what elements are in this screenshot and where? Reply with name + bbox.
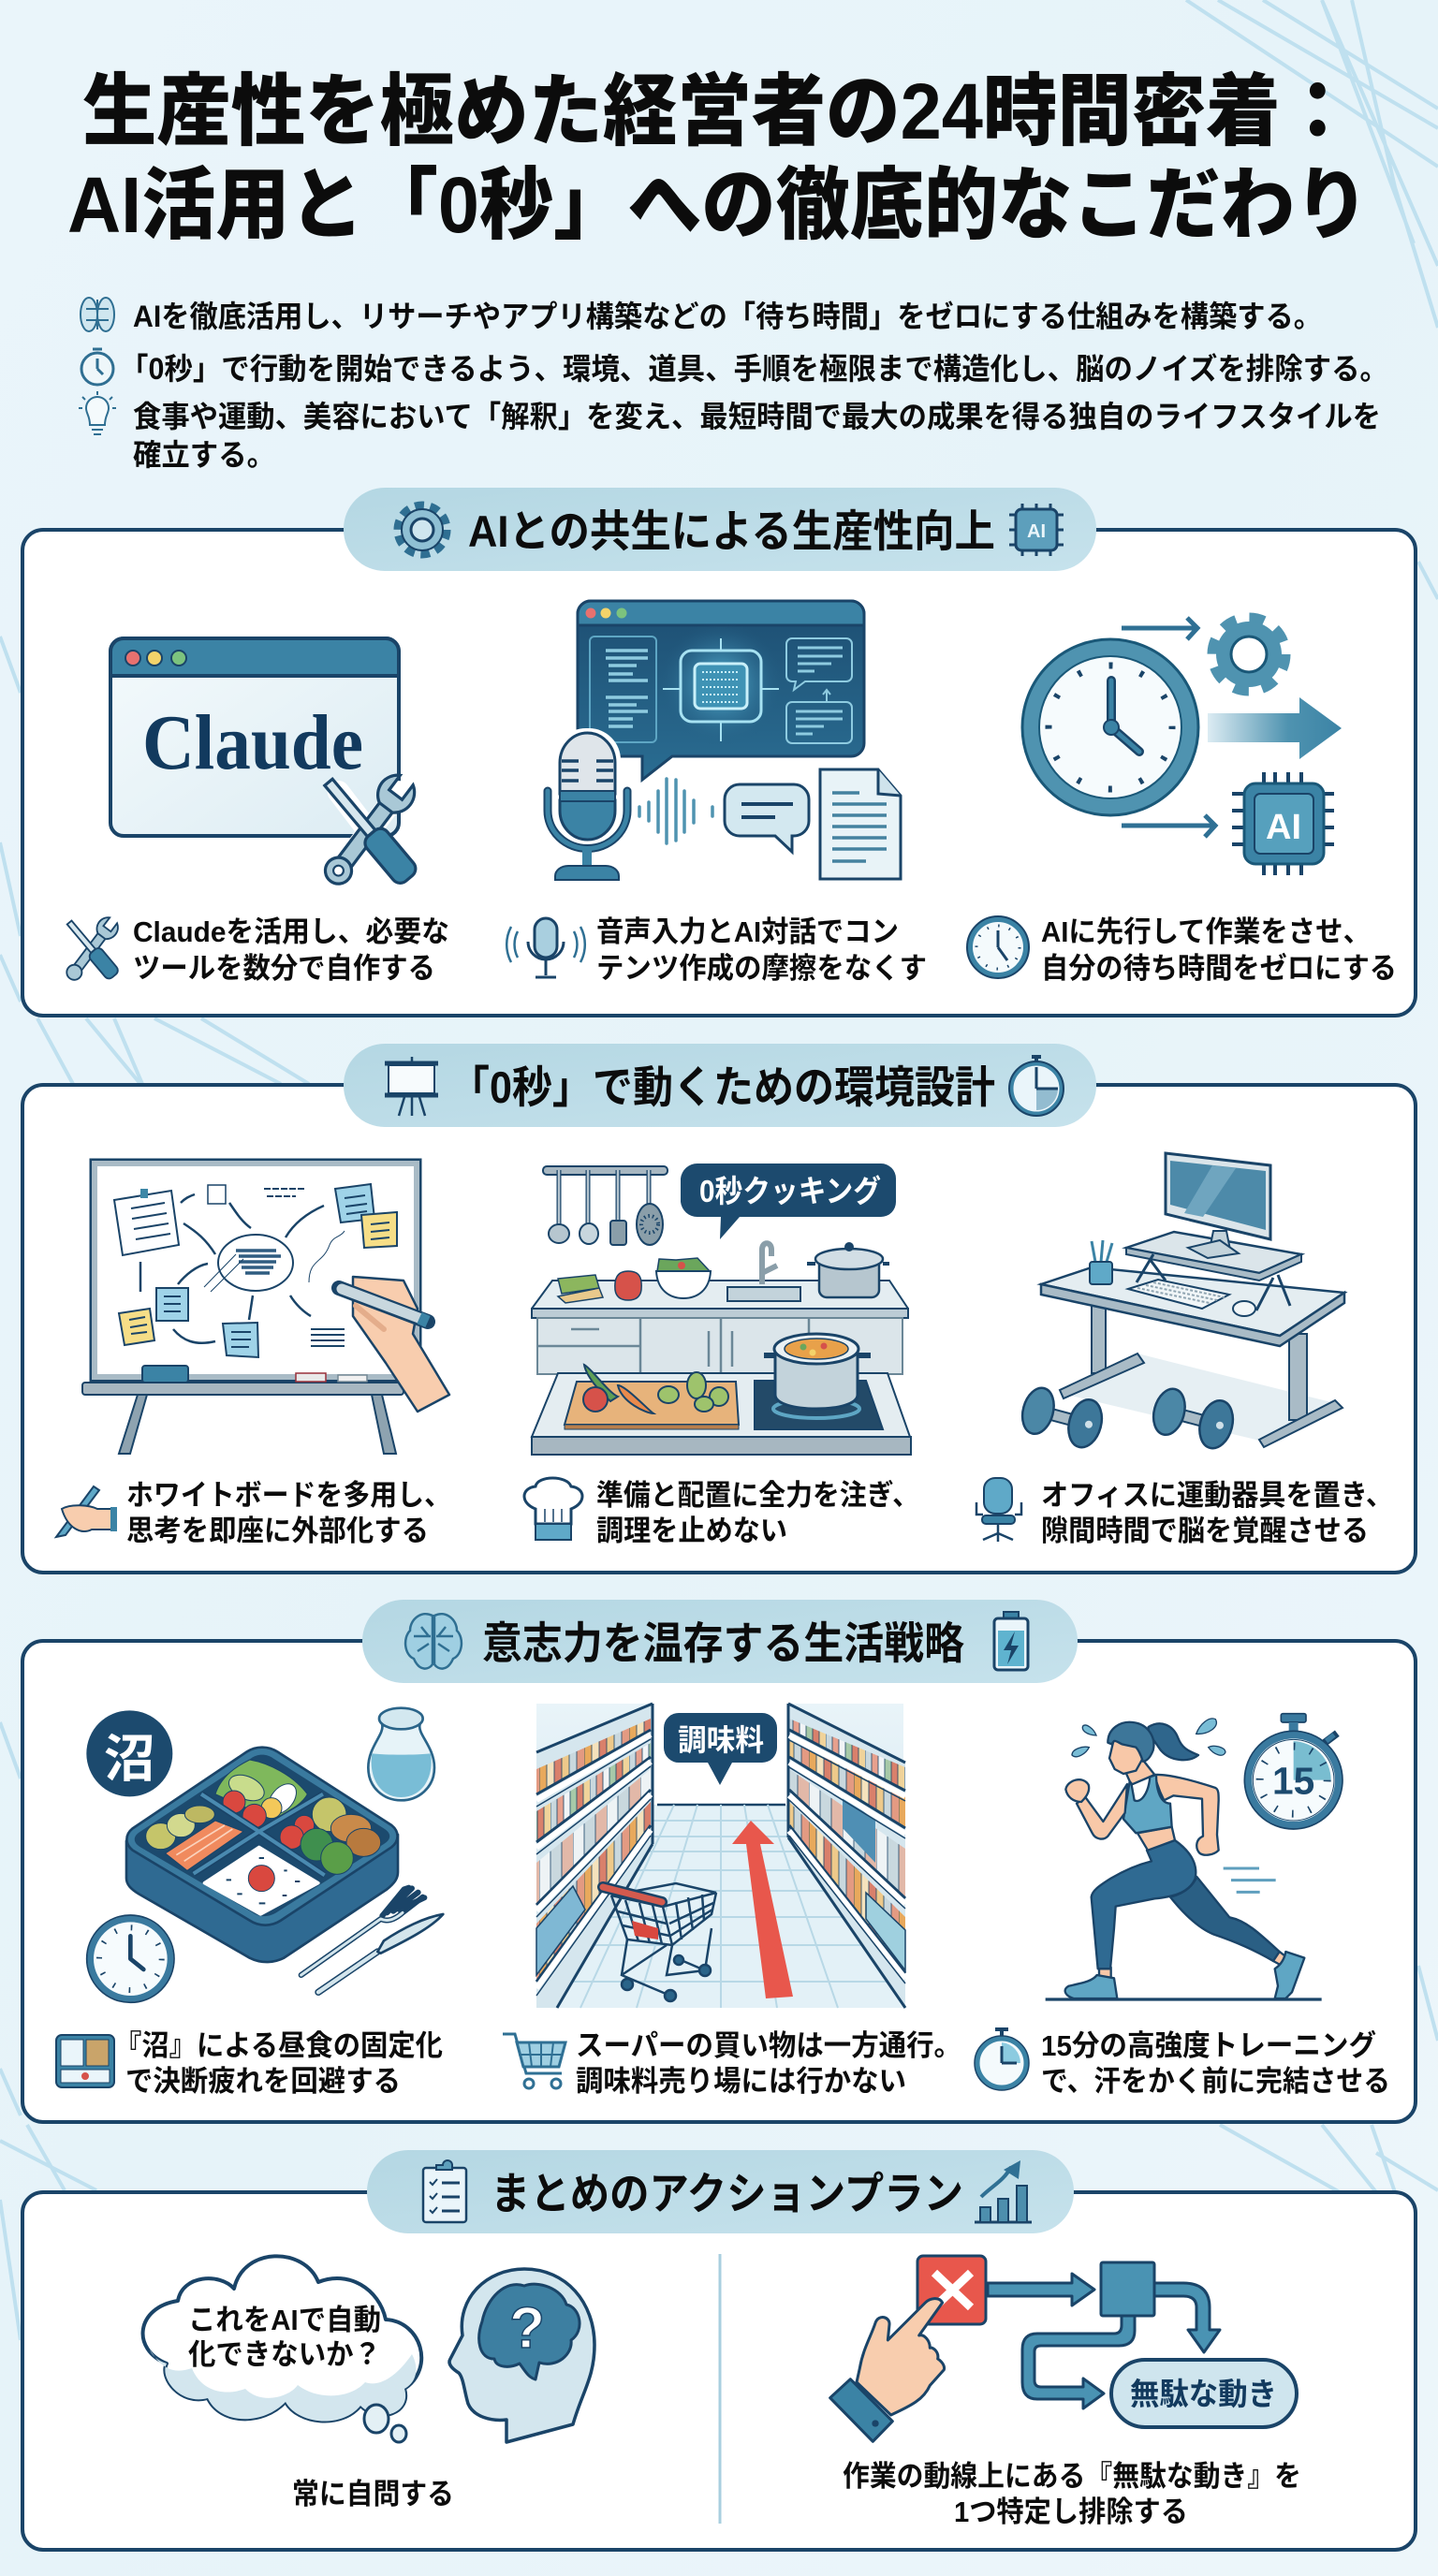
icon: chef hat — [524, 1478, 582, 1540]
text: action: 作業の動線上にある『無駄な動き』を — [843, 2460, 1301, 2493]
caption 3: stopwatch — [975, 2029, 1390, 2098]
heading: AIとの共生による生産性向上 — [468, 506, 995, 556]
hand with marker — [339, 1277, 449, 1412]
desk — [1041, 1232, 1344, 1447]
icon: gear — [400, 507, 445, 552]
pointing hand — [830, 2299, 945, 2441]
icon: cart — [503, 2034, 565, 2088]
clock — [1022, 639, 1198, 815]
caption 3: office chair: 隙間時間で脳を覚醒させる — [1041, 1515, 1369, 1547]
section header pill — [367, 2150, 1074, 2233]
speed lines — [1224, 1868, 1276, 1892]
board — [82, 1160, 420, 1454]
illustration: standing desk with dumbbells — [1018, 1153, 1344, 1452]
illustration: whiteboard with hand — [82, 1160, 449, 1454]
side walls — [536, 1704, 905, 2008]
chip — [1232, 772, 1334, 875]
floor — [557, 1805, 903, 2008]
bowl of salad — [656, 1258, 711, 1298]
icon: brain — [405, 1614, 462, 1669]
icon: hand with pen — [56, 1486, 117, 1537]
illustration: thought cloud and head — [143, 2256, 594, 2510]
icon: clock — [967, 916, 1029, 978]
heading: 「0秒」で動くための環境設計 — [449, 1062, 995, 1112]
thought cloud: 化できないか？ — [188, 2338, 381, 2371]
front leg — [1092, 1840, 1196, 1969]
section header pill — [344, 1044, 1096, 1127]
caption 1: whiteboard — [56, 1479, 451, 1547]
caption 2: mic: テンツ作成の摩擦をなくす — [596, 952, 927, 985]
rear arm — [1154, 1775, 1219, 1855]
icon: clipboard — [423, 2160, 466, 2222]
utensil rail — [543, 1166, 668, 1245]
sports bra — [1123, 1775, 1172, 1833]
icon: light bulb — [79, 391, 116, 434]
document — [820, 769, 901, 879]
caption 1: tools — [62, 915, 449, 985]
pepper — [615, 1271, 641, 1300]
text: 常に自問する: 常に自問する — [292, 2478, 454, 2510]
front counter — [532, 1334, 911, 1455]
panel: 意志力を温存 — [22, 1600, 1416, 2122]
text: action: 1つ特定し排除する — [954, 2496, 1188, 2528]
icon: stopwatch — [1009, 1057, 1064, 1116]
caption 2: mic: 音声入力とAI対話でコン — [596, 915, 899, 948]
front arm — [1077, 1784, 1127, 1839]
caption 2: cart: スーパーの買い物は一方通行。 — [576, 2029, 961, 2062]
chat bubble — [725, 784, 809, 852]
left shelves with products — [536, 1704, 653, 2008]
illustration: kitchen — [532, 1164, 911, 1455]
icon: stopwatch — [81, 349, 113, 385]
icon: microphone — [506, 918, 585, 977]
stopwatch — [1244, 1714, 1343, 1829]
runner — [1065, 1722, 1304, 1998]
chip: AI — [1266, 808, 1301, 847]
fork and knife — [301, 1888, 443, 1992]
caption 1: bento: で決断疲れを回避する — [125, 2065, 401, 2098]
right compartment food — [280, 1797, 381, 1874]
caption 1: tools: ツールを数分で自作する — [133, 952, 435, 985]
panel: AIとの共生 — [22, 488, 1416, 1016]
caption 3: clock: 自分の待ち時間をゼロにする — [1041, 952, 1397, 985]
heading: まとめのアクションプラン — [491, 2169, 963, 2218]
icon: stopwatch — [975, 2029, 1029, 2090]
icon: AI chip — [1009, 504, 1064, 556]
title — [67, 67, 1369, 249]
stopwatch: 15 — [1272, 1760, 1314, 1803]
shoes — [1065, 1975, 1117, 1998]
illustration: runner and stopwatch — [1046, 1714, 1343, 1999]
summary bullets — [79, 298, 1388, 472]
caption 3: clock — [967, 915, 1397, 985]
section header pill — [362, 1600, 1078, 1683]
lunch box — [126, 1748, 398, 1962]
caption 1: whiteboard: ホワイトボードを多用し、 — [126, 1479, 451, 1512]
right shelves with products — [788, 1704, 905, 2008]
caption 3: office chair: オフィスに運動器具を置き、 — [1041, 1479, 1393, 1512]
left compartment food — [146, 1806, 243, 1870]
dark screen speech bubble — [578, 601, 864, 780]
small arrows — [1122, 618, 1215, 837]
head with brain — [449, 2269, 594, 2442]
caption 2: cart: 調味料売り場には行かない — [576, 2065, 906, 2098]
caption 2: mic — [506, 915, 927, 985]
rear leg — [1170, 1877, 1281, 1961]
blue box — [1101, 2262, 1154, 2316]
head — [1109, 1738, 1144, 1774]
illustration: clock gear chip arrow — [1022, 618, 1342, 875]
vegetables — [558, 1275, 599, 1294]
icon: presentation board — [385, 1057, 438, 1116]
caption 1: whiteboard: 思考を即座に外部化する — [126, 1515, 429, 1547]
pill: 無駄な動き — [1111, 2360, 1297, 2427]
notes and mind map — [114, 1184, 397, 1357]
upper pot — [807, 1242, 889, 1297]
caption 3: office chair — [976, 1478, 1393, 1547]
icon: AI chip: AI — [1027, 521, 1046, 542]
illustration: Claude window with tools — [110, 638, 420, 892]
red x box — [917, 2256, 986, 2324]
title: 生産性を極めた経営者の24時間密着： — [82, 67, 1355, 155]
caption 3: stopwatch: 15分の高強度トレーニング — [1041, 2029, 1376, 2062]
bullet text 3: 食事や運動、美容において「解釈」を変え、最短時間で最大の成果を得る独自のライフスタイルを — [133, 400, 1381, 433]
head with brain: ? — [509, 2296, 545, 2361]
icon: growth chart — [975, 2160, 1032, 2222]
panel: アクションプラン — [22, 2150, 1416, 2550]
thought cloud: これをAIで自動 — [188, 2304, 381, 2336]
thought cloud — [143, 2256, 421, 2442]
top compartment food — [215, 1760, 307, 1828]
caption 1: bento — [56, 2029, 443, 2098]
flow arrows — [988, 2274, 1220, 2408]
bullet text 2: 「0秒」で行動を開始できるよう、環境、道具、手順を極限まで構造化し、脳のノイズを排除する。 — [120, 352, 1388, 386]
monitor — [1166, 1153, 1270, 1258]
sweat drops — [1072, 1719, 1225, 1757]
沼 badge — [86, 1710, 172, 1796]
caption 2: chef hat — [524, 1478, 919, 1547]
caption 1: tools: Claudeを活用し、必要な — [133, 915, 449, 948]
big arrow — [1208, 697, 1342, 759]
dumbbell pair — [1018, 1383, 1238, 1452]
ankles — [1099, 1952, 1286, 1980]
cutting board — [565, 1365, 739, 1429]
調味料 sign — [664, 1713, 777, 1785]
icon: brain — [81, 298, 114, 331]
sound wave — [639, 779, 712, 843]
midriff — [1137, 1827, 1175, 1851]
illustration: flow chart with hand — [830, 2256, 1301, 2528]
neck — [1125, 1760, 1154, 1785]
speech bubble: 0秒クッキング: 0秒クッキング — [699, 1174, 881, 1208]
illustration: supermarket aisle — [536, 1704, 905, 2008]
heading: 意志力を温存する生活戦略 — [482, 1618, 964, 1668]
caption 2: cart — [503, 2029, 961, 2098]
caption 2: chef hat: 調理を止めない — [596, 1515, 787, 1547]
illustration: voice input and AI screen — [548, 601, 901, 880]
speech bubble: 0秒クッキング — [681, 1164, 896, 1239]
icon: battery — [994, 1612, 1028, 1670]
ponytail — [1149, 1723, 1198, 1760]
bullet text 1: AIを徹底活用し、リサーチやアプリ構築などの「待ち時間」をゼロにする仕組みを構築する。 — [133, 300, 1322, 333]
water bottle — [368, 1708, 434, 1800]
text: action — [843, 2460, 1301, 2528]
divider — [719, 2254, 721, 2524]
section header pill — [344, 488, 1096, 571]
dividers — [194, 1794, 325, 1875]
caption 3: stopwatch: で、汗をかく前に完結させる — [1041, 2065, 1390, 2098]
panel: 0秒環境設計 — [22, 1044, 1416, 1573]
clock — [87, 1915, 174, 2002]
icon: tools — [62, 915, 122, 985]
沼 badge: 沼 — [104, 1730, 155, 1788]
調味料 sign: 調味料 — [678, 1723, 764, 1757]
caption 3: clock: AIに先行して作業をさせ、 — [1041, 915, 1371, 948]
keyboard and mouse — [1128, 1280, 1255, 1316]
caption 1: bento: 『沼』による昼食の固定化 — [114, 2029, 443, 2062]
red one-way arrow — [732, 1821, 793, 1998]
rice — [204, 1847, 318, 1914]
back counter and cabinets — [532, 1242, 908, 1374]
stove and pot — [755, 1334, 883, 1429]
shopping cart — [603, 1883, 716, 2001]
pill: 無駄な動き: 無駄な動き — [1130, 2377, 1277, 2411]
icon: office chair — [976, 1478, 1021, 1542]
gear — [1215, 621, 1283, 688]
caption 2: chef hat: 準備と配置に全力を注ぎ、 — [596, 1479, 919, 1512]
pen cup — [1090, 1240, 1112, 1284]
microphone — [548, 728, 627, 880]
icon: crossed tools — [316, 769, 420, 892]
wordmark: Claude: Claude — [142, 699, 363, 786]
summary bullets: 確立する。 — [133, 438, 275, 472]
illustration: bento — [86, 1708, 443, 2002]
icon: bento box — [56, 2035, 114, 2087]
title: AI活用と「0秒」への徹底的なこだわり — [67, 161, 1369, 249]
